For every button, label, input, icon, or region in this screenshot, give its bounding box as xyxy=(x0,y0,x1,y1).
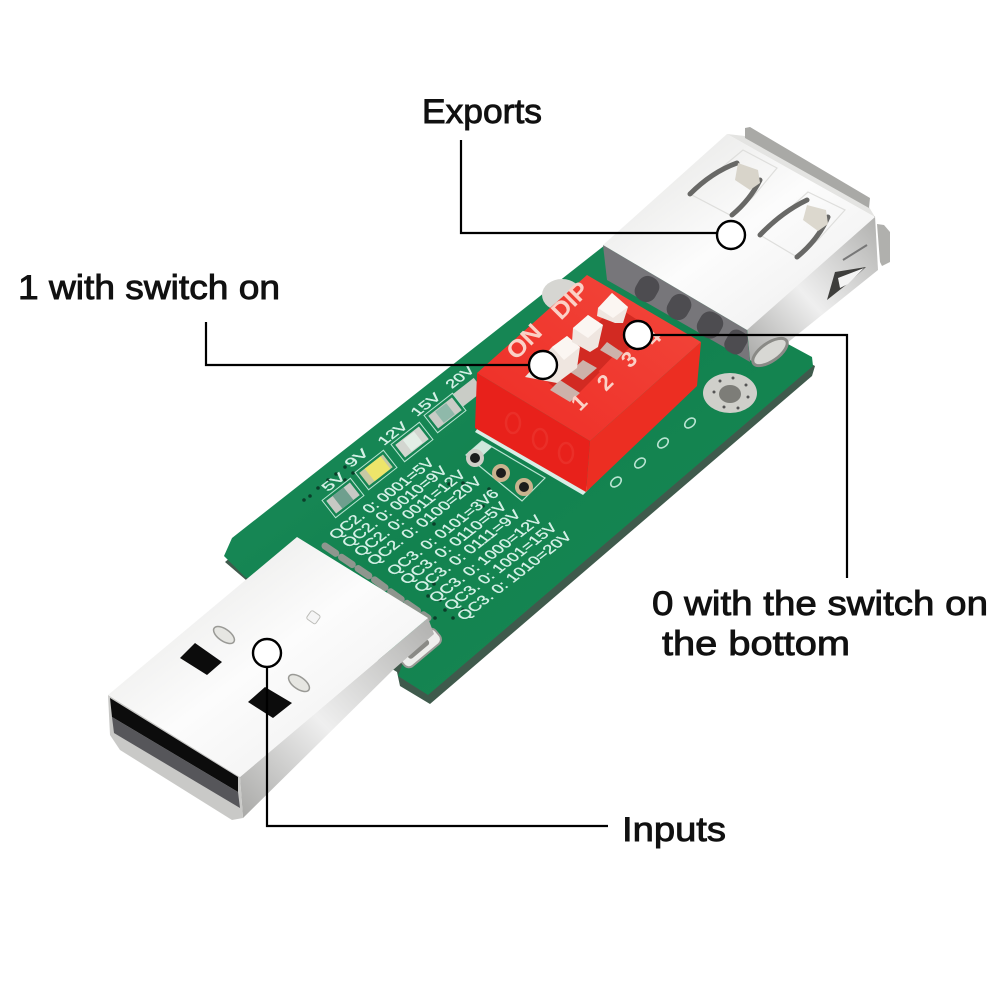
silkscreen header outline xyxy=(475,425,590,495)
silkscreen voltage table xyxy=(317,363,576,623)
switch printed labels: 3 xyxy=(616,346,642,373)
silkscreen voltage table: 15V xyxy=(406,390,445,419)
male USB plug xyxy=(108,537,443,820)
connector side slit xyxy=(843,245,867,260)
plug small mark xyxy=(306,610,321,625)
knob 3 xyxy=(597,293,628,323)
plug dimple left xyxy=(211,623,237,647)
slot 1 xyxy=(540,350,600,402)
connector rear flange xyxy=(727,127,875,217)
callout: 0 with the switch on the bottom: 0 with the switch on xyxy=(652,585,988,623)
connector contact bumps xyxy=(631,272,751,357)
knob 2 xyxy=(572,315,603,352)
callout: 1 with switch on: 1 with switch on xyxy=(18,269,280,307)
connector opening xyxy=(603,245,750,362)
front mounting hole xyxy=(703,373,757,413)
silkscreen voltage table: QC3. 0: 1010=20V xyxy=(453,529,576,623)
silkscreen voltage table: QC3. 0: 1000=12V xyxy=(425,513,547,605)
board vias xyxy=(302,465,491,620)
callout: 1 with switch on xyxy=(18,269,557,379)
callout: Exports xyxy=(422,93,745,249)
device photo illustration xyxy=(108,127,890,820)
silkscreen voltage table: 20V xyxy=(441,363,479,391)
LEDs xyxy=(322,378,484,518)
plug side slot xyxy=(397,626,443,670)
circuit board xyxy=(224,245,815,704)
switch printed labels: 1 xyxy=(566,389,592,416)
callout: Inputs xyxy=(253,639,726,849)
callout: 0 with the switch on the bottom xyxy=(624,321,988,663)
silkscreen voltage table: 9V xyxy=(340,445,373,470)
switch printed labels: 2 xyxy=(592,369,618,396)
plug opening top band xyxy=(110,698,238,792)
zero markings on board xyxy=(609,416,697,489)
connector spring tab right xyxy=(760,192,845,257)
silkscreen voltage table: QC3. 0: 0110=5V xyxy=(396,499,511,587)
knob 1 xyxy=(525,336,580,383)
silkscreen voltage table: QC2. 0: 0001=5V xyxy=(325,456,439,542)
plug top shell xyxy=(108,537,428,777)
switch embossed marks xyxy=(506,413,573,463)
connector solder lug xyxy=(748,333,792,371)
callout: 0 with the switch on the bottom: the bottom xyxy=(662,625,850,663)
header solder pads xyxy=(466,449,533,496)
silkscreen voltage table: QC2. 0: 0011=12V xyxy=(350,468,470,559)
female USB connector xyxy=(603,127,890,362)
switch right face xyxy=(586,342,701,492)
connector top shell xyxy=(603,134,875,330)
switch printed labels: DIP xyxy=(546,276,595,325)
plug front face xyxy=(108,695,243,820)
silkscreen voltage table: QC2. 0: 0010=9V xyxy=(338,464,452,550)
silkscreen voltage table: 12V xyxy=(373,419,412,448)
switch printed labels xyxy=(501,276,667,416)
plug dimple right xyxy=(286,671,312,695)
plug hole left xyxy=(180,643,222,675)
switch printed labels: 4 xyxy=(640,324,667,351)
silkscreen voltage table: QC2. 0: 0100=20V xyxy=(363,474,486,568)
connector side clip xyxy=(877,224,890,266)
slot 3 xyxy=(592,306,650,353)
switch left face xyxy=(475,373,590,492)
callout: Exports: Exports xyxy=(422,93,542,131)
plug solder joints xyxy=(325,546,428,618)
silkscreen voltage table: QC3. 0: 0111=9V xyxy=(410,507,525,595)
rear mounting hole xyxy=(542,279,582,311)
red DIP switch xyxy=(475,275,701,492)
connector latch slot xyxy=(827,267,866,300)
slot 2 xyxy=(566,328,622,373)
switch top face xyxy=(477,275,701,441)
plug hole right xyxy=(248,687,292,718)
plug side wall xyxy=(240,618,434,818)
switch printed labels: ON xyxy=(501,319,548,365)
connector spring tab left xyxy=(690,150,777,215)
silkscreen voltage table: QC3. 0: 0101=3V6 xyxy=(383,487,503,578)
silkscreen voltage table: 5V xyxy=(317,469,350,494)
connector side wall xyxy=(747,216,878,362)
callout: Inputs: Inputs xyxy=(622,811,726,849)
silkscreen voltage table: QC3. 0: 1001=15V xyxy=(440,521,562,613)
plug opening tongue xyxy=(112,717,240,808)
